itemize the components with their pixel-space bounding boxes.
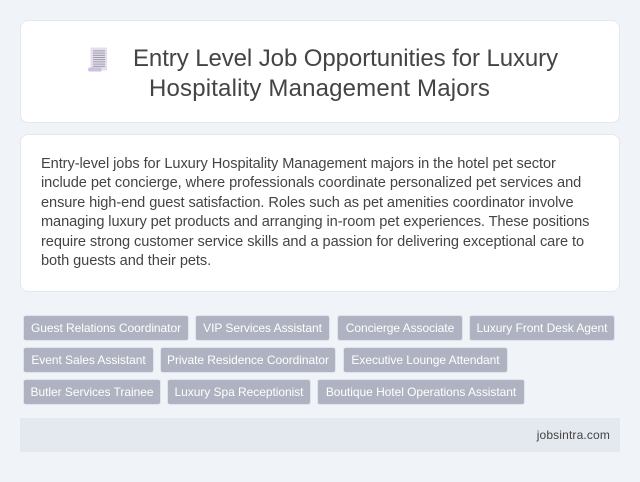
- tag: [23, 315, 189, 341]
- tag: Guest Relations Coordinator: [31, 321, 181, 335]
- tag: [23, 347, 154, 373]
- tag: Luxury Front Desk Agent: [477, 321, 607, 335]
- description text: include pet concierge, where professionals coordinate personalized pet services and: [41, 175, 581, 191]
- tag: Event Sales Assistant: [31, 353, 146, 367]
- description text: Entry-level jobs for Luxury Hospitality Management majors in the hotel pet sector: [41, 156, 556, 172]
- heading: Entry Level Job Opportunities for Luxury: [133, 45, 558, 72]
- tag: Private Residence Coordinator: [167, 353, 329, 367]
- heading: Hospitality Management Majors: [149, 75, 490, 102]
- tag: Concierge Associate: [346, 321, 454, 335]
- description text: require strong customer service skills and a passion for delivering exceptional care to: [41, 234, 584, 250]
- description text: [41, 156, 589, 269]
- heading: [133, 45, 558, 102]
- tag: [195, 315, 330, 341]
- tag: Luxury Spa Receptionist: [175, 385, 303, 399]
- description panel: [20, 134, 620, 292]
- tag: VIP Services Assistant: [203, 321, 322, 335]
- tags: job titles: [23, 315, 615, 405]
- header panel: [20, 20, 620, 123]
- tag: [167, 379, 311, 405]
- description text: both guests and their pets.: [41, 253, 211, 269]
- tag: Boutique Hotel Operations Assistant: [326, 385, 516, 399]
- icon: document receipt: [88, 48, 107, 72]
- footer bar: [20, 418, 620, 452]
- tag: [469, 315, 615, 341]
- tag: [160, 347, 336, 373]
- tag: [23, 379, 161, 405]
- tag: Executive Lounge Attendant: [351, 353, 500, 367]
- tag: Butler Services Trainee: [31, 385, 153, 399]
- footer link: jobsintra.com: [537, 428, 610, 442]
- description text: managing luxury pet products and arranging in-room pet experiences. These positions: [41, 214, 589, 230]
- tag: [337, 315, 463, 341]
- description text: ensure high-end guest satisfaction. Roles such as pet amenities coordinator involve: [41, 195, 574, 211]
- tag: [343, 347, 508, 373]
- tag: [317, 379, 525, 405]
